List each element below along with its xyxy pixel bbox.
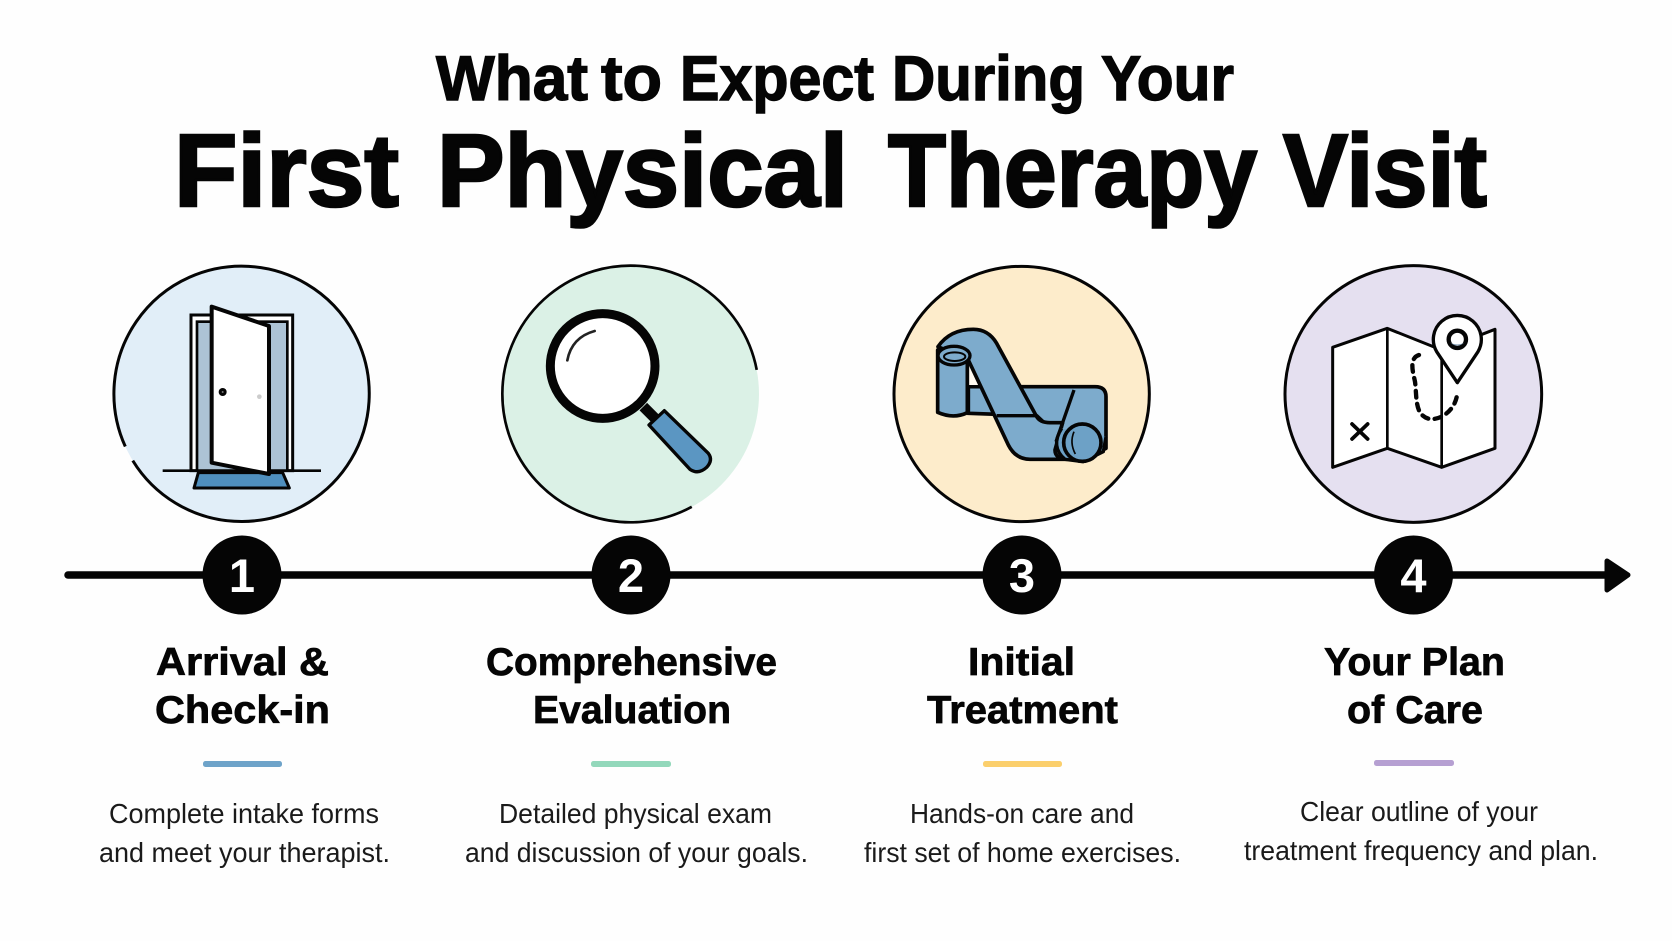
step 4 accent bar: [1374, 760, 1454, 766]
title line 1: Expect: [680, 44, 874, 114]
step 2 marker: 2: [618, 549, 644, 602]
step 1 description: Complete intake forms: [109, 798, 379, 829]
step 4 description: treatment frequency and plan.: [1244, 835, 1598, 866]
step 2 heading: [486, 641, 777, 732]
step 3 description: first set of home exercises.: [864, 837, 1181, 868]
step 4 marker: [1374, 536, 1453, 614]
step 4 heading: Your Plan: [1324, 641, 1505, 684]
title: [174, 44, 1487, 228]
step 4 heading: of Care: [1347, 689, 1483, 732]
step 3 marker: 3: [1009, 549, 1035, 602]
step 1 heading: [155, 641, 330, 732]
step 1 heading: Check-in: [155, 689, 330, 732]
step 1 description: [99, 798, 390, 868]
step 1 marker: [202, 536, 282, 614]
step 4 heading: [1324, 641, 1505, 732]
step 1 marker: 1: [229, 549, 255, 602]
step 1 description: and meet your therapist.: [99, 837, 390, 868]
title line 2: Visit: [1283, 113, 1487, 228]
step 1 text: Arrival & Check-in: [99, 641, 390, 868]
step 2 marker: [592, 536, 670, 614]
step 4 marker: 4: [1400, 549, 1427, 602]
step 2 description: Detailed physical exam: [499, 798, 772, 829]
step 3 heading: Treatment: [927, 689, 1118, 732]
step 2 description: [465, 798, 808, 868]
step 4 description: Clear outline of your: [1300, 796, 1538, 827]
step 2 description: and discussion of your goals.: [465, 837, 808, 868]
title line 2: Therapy: [888, 113, 1257, 228]
icon: resistance band in yellow circle: [894, 266, 1149, 522]
title line 1: to: [601, 44, 662, 114]
step 2 heading: Evaluation: [533, 689, 731, 732]
step 4 text: Your Plan of Care: [1244, 641, 1598, 866]
title line 1: [436, 44, 1234, 114]
timeline arrow: [68, 561, 1628, 590]
step 1 accent bar: [203, 761, 282, 767]
step 2 accent bar: [591, 761, 671, 767]
title line 1: What: [436, 44, 588, 114]
icon: folded map with pin in purple circle: [1285, 266, 1542, 522]
step 3 description: [864, 798, 1181, 868]
step 3 accent bar: [983, 761, 1062, 767]
step 3 text: Initial Treatment: [864, 641, 1181, 868]
title line 1: During: [892, 44, 1085, 114]
title line 1: Your: [1101, 44, 1234, 114]
step 2 heading: Comprehensive: [486, 641, 777, 684]
icon: open door in blue circle: [114, 266, 369, 522]
title line 2: [174, 113, 1487, 228]
step 2 text: Comprehensive Evaluation: [465, 641, 808, 868]
step 3 description: Hands-on care and: [910, 798, 1134, 829]
step 3 heading: [927, 641, 1118, 732]
step 3 marker: [982, 536, 1062, 614]
step 4 description: [1244, 796, 1598, 866]
title line 2: Physical: [437, 113, 848, 228]
icon: magnifying glass in green circle: [502, 266, 759, 522]
step 3 heading: Initial: [968, 641, 1075, 684]
title line 2: First: [174, 113, 399, 228]
step 1 heading: Arrival &: [156, 641, 329, 684]
